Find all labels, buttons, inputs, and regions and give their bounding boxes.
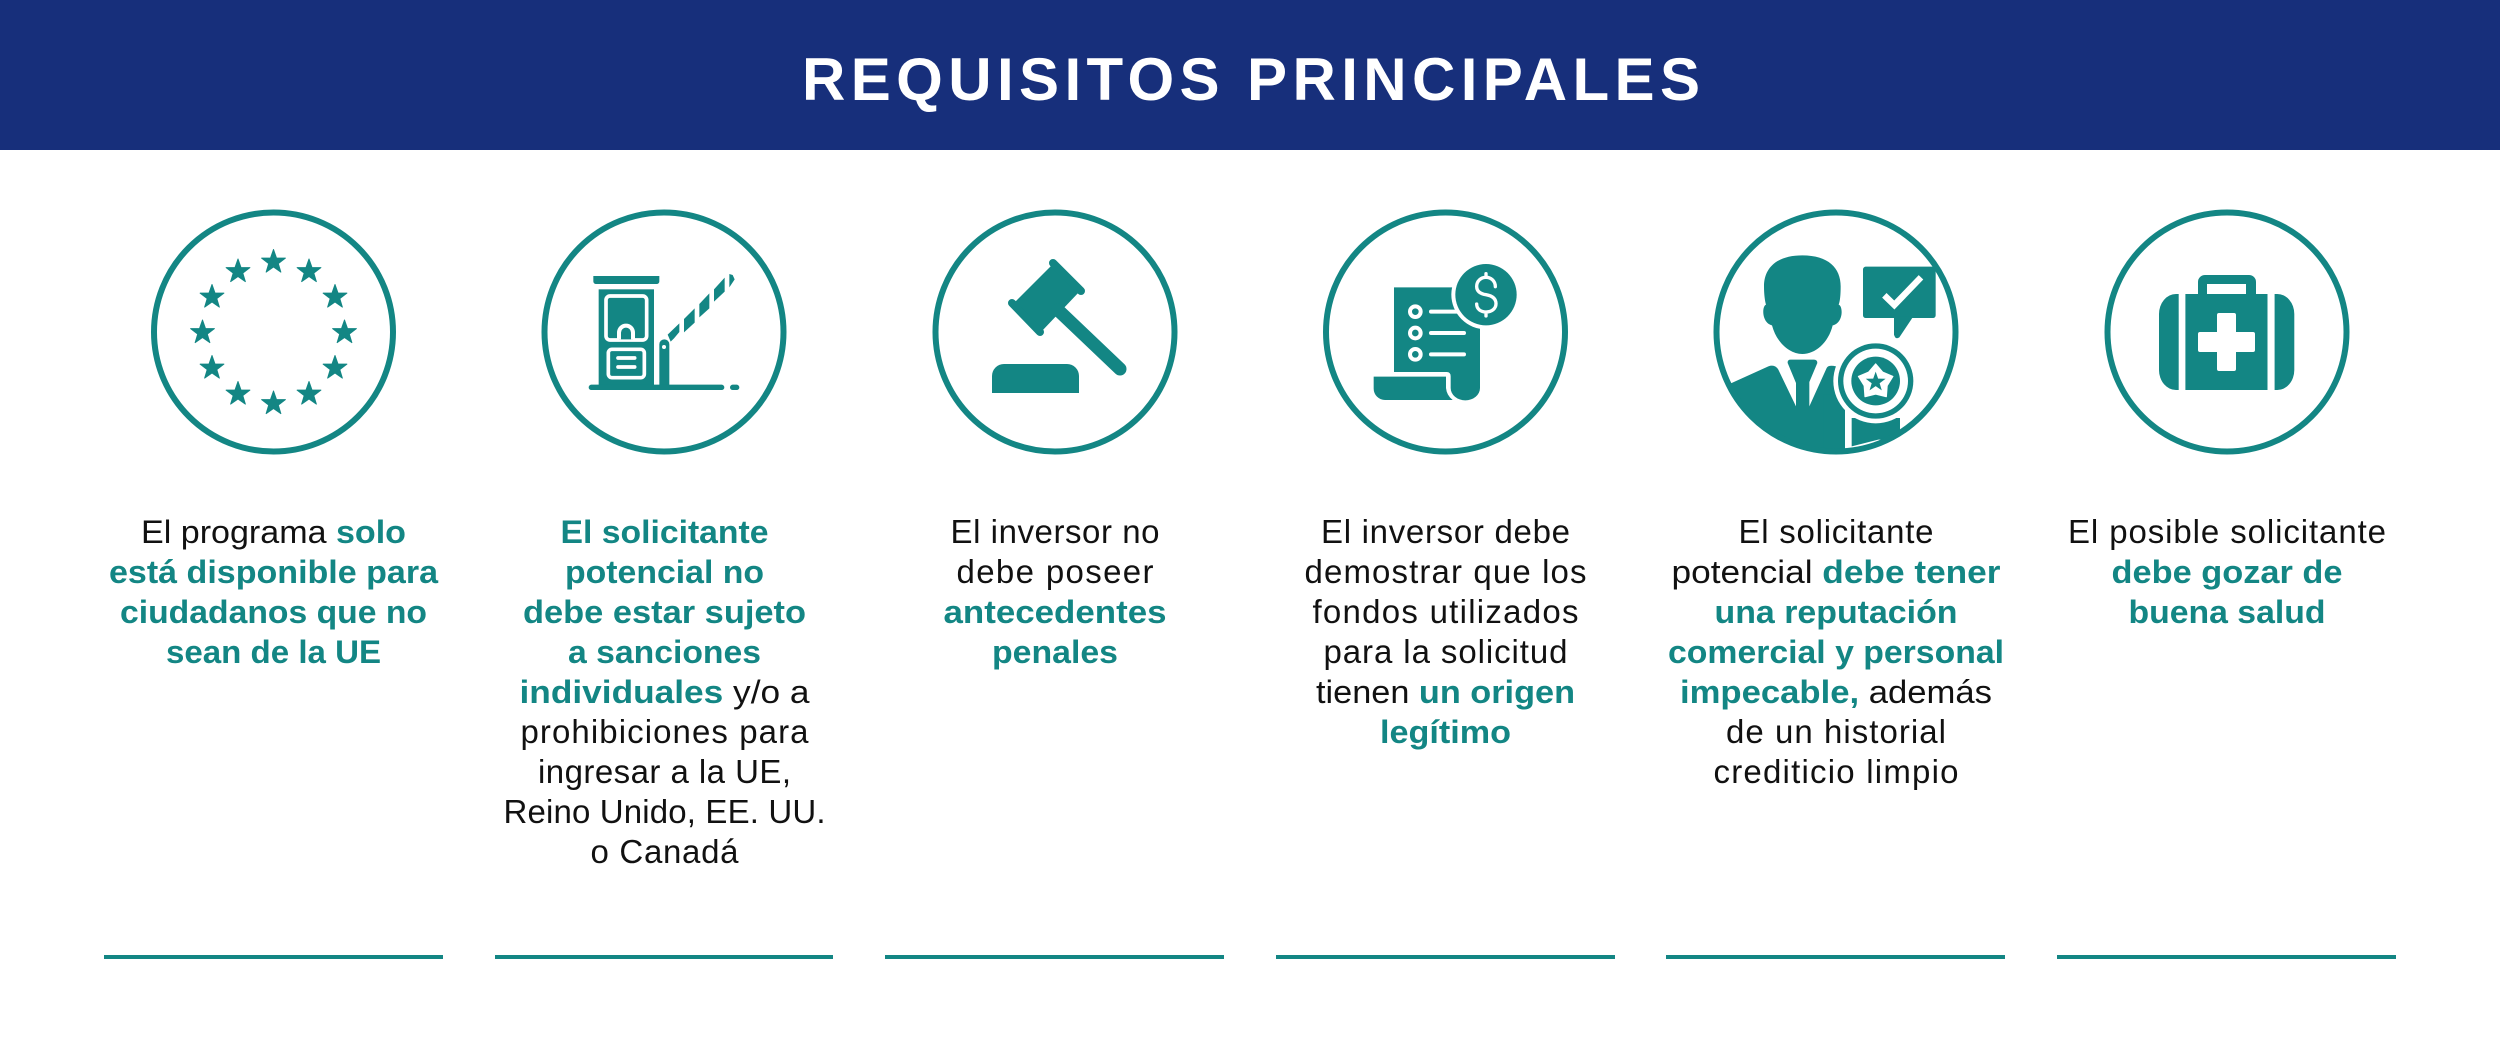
text: legitimate funds: legítimo xyxy=(1380,714,1511,750)
text: legitimate funds xyxy=(1304,513,1586,750)
text: EU citizens xyxy=(109,514,438,670)
icon: document with dollar coin xyxy=(1326,212,1565,452)
text: health: debe gozar de xyxy=(2112,554,2342,590)
text: legitimate funds: para la solicitud xyxy=(1324,633,1568,670)
panel: EU citizens requirement xyxy=(104,212,443,959)
text: sanctions: potencial no xyxy=(565,554,764,590)
text: legitimate funds: fondos utilizados xyxy=(1312,593,1578,630)
text: EU citizens: está disponible para xyxy=(109,554,438,590)
text: criminal record: penales xyxy=(992,634,1118,670)
text: reputation: impecable, además xyxy=(1680,674,1992,710)
text: reputation: de un historial xyxy=(1726,713,1946,750)
text: legitimate funds: El inversor debe xyxy=(1321,513,1570,550)
text: sanctions: El solicitante xyxy=(560,514,768,550)
text: EU citizens: sean de la UE xyxy=(166,634,381,670)
text: criminal record xyxy=(944,513,1166,670)
text: criminal record: El inversor no xyxy=(950,513,1160,550)
panel: sanctions requirement xyxy=(495,212,833,959)
text: reputation: crediticio limpio xyxy=(1714,753,1958,790)
text: sanctions: prohibiciones para xyxy=(520,713,809,750)
icon: gavel xyxy=(936,212,1174,452)
text: sanctions: individuales y/o a xyxy=(520,674,810,710)
text: reputation xyxy=(1668,513,2004,790)
text: legitimate funds: demostrar que los xyxy=(1304,553,1586,590)
icon: border barrier booth xyxy=(544,212,784,452)
text: sanctions xyxy=(504,514,826,870)
icon: businessman with badge and check bubble xyxy=(1710,212,1956,475)
panel: reputation requirement xyxy=(1666,212,2005,959)
text: EU citizens: El programa solo xyxy=(141,514,406,550)
text: legitimate funds: tienen un origen xyxy=(1316,674,1575,710)
text: sanctions: a sanciones xyxy=(568,634,761,670)
text: health xyxy=(2068,513,2386,630)
panel: legitimate funds requirement xyxy=(1276,212,1615,959)
header banner xyxy=(0,0,2500,150)
text: reputation: potencial debe tener xyxy=(1672,554,2000,590)
panel: criminal record requirement xyxy=(885,212,1224,959)
panel: health requirement xyxy=(2057,212,2396,959)
text: health: buena salud xyxy=(2128,594,2326,630)
text: criminal record: antecedentes xyxy=(944,594,1166,630)
text: sanctions: debe estar sujeto xyxy=(523,594,806,630)
icon: EU stars circle xyxy=(154,212,393,452)
text: reputation: El solicitante xyxy=(1738,513,1934,550)
text: criminal record: debe poseer xyxy=(956,553,1154,590)
text: reputation: comercial y personal xyxy=(1668,634,2004,670)
text: health: El posible solicitante xyxy=(2068,513,2386,550)
title: REQUISITOS PRINCIPALES xyxy=(802,46,1700,113)
icon: first aid kit xyxy=(2108,212,2346,452)
text: EU citizens: ciudadanos que no xyxy=(120,594,427,630)
text: sanctions: o Canadá xyxy=(590,833,739,870)
text: sanctions: ingresar a la UE, xyxy=(538,753,791,790)
text: sanctions: Reino Unido, EE. UU. xyxy=(504,793,826,830)
text: reputation: una reputación xyxy=(1714,594,1958,630)
